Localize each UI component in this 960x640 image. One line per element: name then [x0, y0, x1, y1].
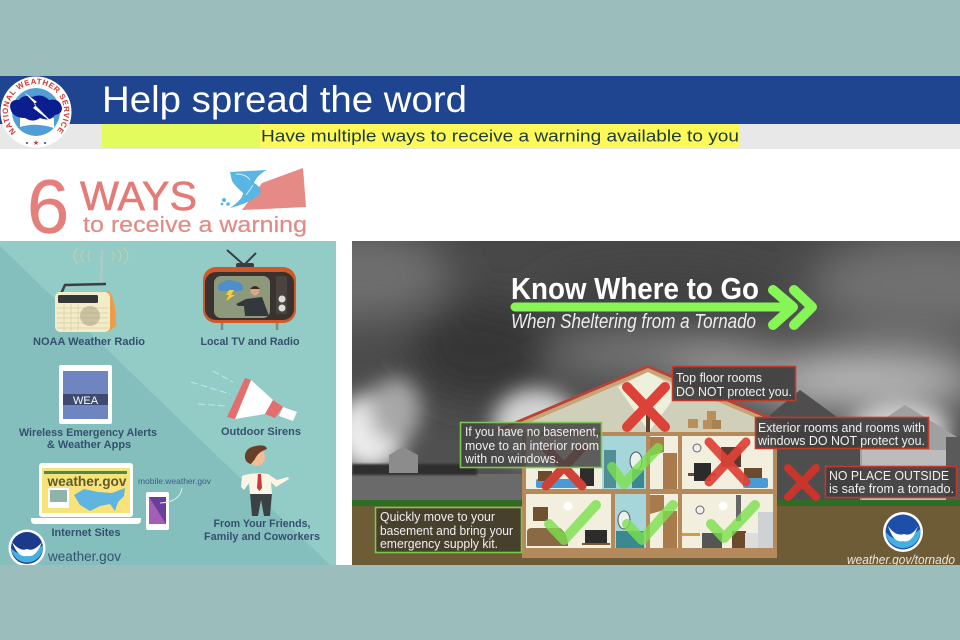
heading: 6 ways to receive a warning — [27, 165, 307, 250]
label: mobile.weather.gov: mobile.weather.gov — [138, 477, 211, 486]
ground — [352, 500, 960, 506]
callout: exterior rooms — [756, 418, 928, 448]
icon: national weather service logo: ★ — [33, 139, 39, 147]
callout: basement: emergency supply kit. — [380, 536, 498, 551]
callout: no basement: move to an interior room — [465, 438, 599, 453]
storm photo background — [352, 241, 960, 500]
green check: basement left — [549, 505, 596, 540]
icon: WEA tablet — [59, 365, 112, 424]
grain bin left — [389, 447, 418, 473]
callout: no basement — [460, 422, 602, 468]
barns right — [770, 390, 860, 466]
callout: basement: basement and bring your — [380, 523, 514, 538]
heading: 6 ways to receive a warning: to receive a warning — [83, 212, 307, 237]
house frame — [522, 432, 777, 558]
label: weather.gov/tornado: weather.gov/tornado — [847, 553, 955, 567]
icon: noaa logo — [8, 530, 46, 566]
icon: phone — [146, 488, 182, 530]
label: local tv and radio: Local TV and Radio — [200, 336, 300, 348]
callout: no basement: with no windows. — [464, 451, 559, 466]
callout: no place outside: is safe from a tornado. — [829, 481, 954, 496]
icon: laptop with weather.gov — [31, 463, 141, 524]
panel: six ways — [0, 241, 336, 566]
icon: television — [203, 250, 296, 330]
panel: know where to go — [352, 241, 960, 565]
icon: outdoor siren — [191, 371, 297, 421]
icon: national weather service logo: NATIONAL WEATHER SERVICE — [2, 78, 70, 135]
label: outdoor sirens: Outdoor Sirens — [221, 426, 301, 438]
callout: top floor rooms: DO NOT protect you. — [676, 384, 792, 399]
subtitle highlight — [102, 124, 740, 148]
subtitle: when sheltering: When Sheltering from a Tornado — [511, 311, 756, 333]
basement right — [736, 495, 741, 521]
red X: outside — [788, 468, 816, 497]
callout: exterior rooms: Exterior rooms and rooms with — [758, 420, 925, 435]
label: from your friends: Family and Coworkers — [204, 531, 320, 543]
label: from your friends: From Your Friends, — [214, 518, 310, 530]
callout: basement — [376, 508, 522, 552]
stairs — [650, 437, 664, 456]
arrow: green chevrons — [515, 290, 812, 325]
red X: top floor — [627, 387, 665, 427]
attic boxes — [688, 419, 698, 428]
label: internet sites: Internet Sites — [52, 527, 120, 539]
red X: main floor left — [546, 448, 582, 486]
callout: top floor rooms: Top floor rooms — [676, 370, 762, 385]
icon: tornado and wind — [221, 168, 306, 210]
title: know where to go: Know Where to Go — [511, 271, 759, 306]
callout: exterior rooms: windows DO NOT protect you. — [757, 433, 925, 448]
callout: no basement: If you have no basement, — [465, 424, 599, 439]
red X: main floor right — [709, 442, 746, 482]
house cross-section — [490, 365, 806, 558]
icon: noaa logo right — [883, 512, 923, 552]
icon: person talking — [241, 445, 289, 516]
label: wireless emergency alerts: & Weather Apps — [47, 439, 131, 451]
callout: no place outside: NO PLACE OUTSIDE — [829, 468, 949, 483]
heading: 6 ways to receive a warning: WAYS — [80, 173, 197, 219]
header banner — [0, 76, 960, 149]
heading: 6 ways to receive a warning: 6 — [27, 165, 69, 250]
label: weather.gov: weather.gov — [47, 549, 121, 564]
roof — [491, 365, 770, 432]
label: noaa weather radio: NOAA Weather Radio — [33, 336, 145, 348]
icon: laptop with weather.gov: weather.gov — [46, 474, 127, 489]
bedroom left — [536, 479, 578, 488]
green check: basement right — [711, 505, 755, 538]
label: wireless emergency alerts: Wireless Emergency Alerts — [19, 427, 157, 439]
callout: basement: Quickly move to your — [380, 509, 496, 524]
slide white area — [0, 149, 960, 565]
callout: top floor rooms — [672, 366, 796, 400]
callout: no place outside — [826, 466, 956, 498]
icon: WEA tablet: WEA — [73, 395, 99, 407]
icon: weather radio — [55, 248, 128, 332]
green check: main floor — [612, 448, 658, 484]
basement left furniture — [533, 507, 548, 521]
green check: basement middle — [627, 505, 673, 540]
bathroom main — [604, 450, 616, 488]
heading: help spread the word: Help spread the word — [102, 79, 467, 120]
basement bathroom — [618, 511, 630, 529]
subtitle text: Have multiple ways to receive a warning available to you — [261, 126, 739, 146]
bedroom right — [688, 473, 716, 476]
